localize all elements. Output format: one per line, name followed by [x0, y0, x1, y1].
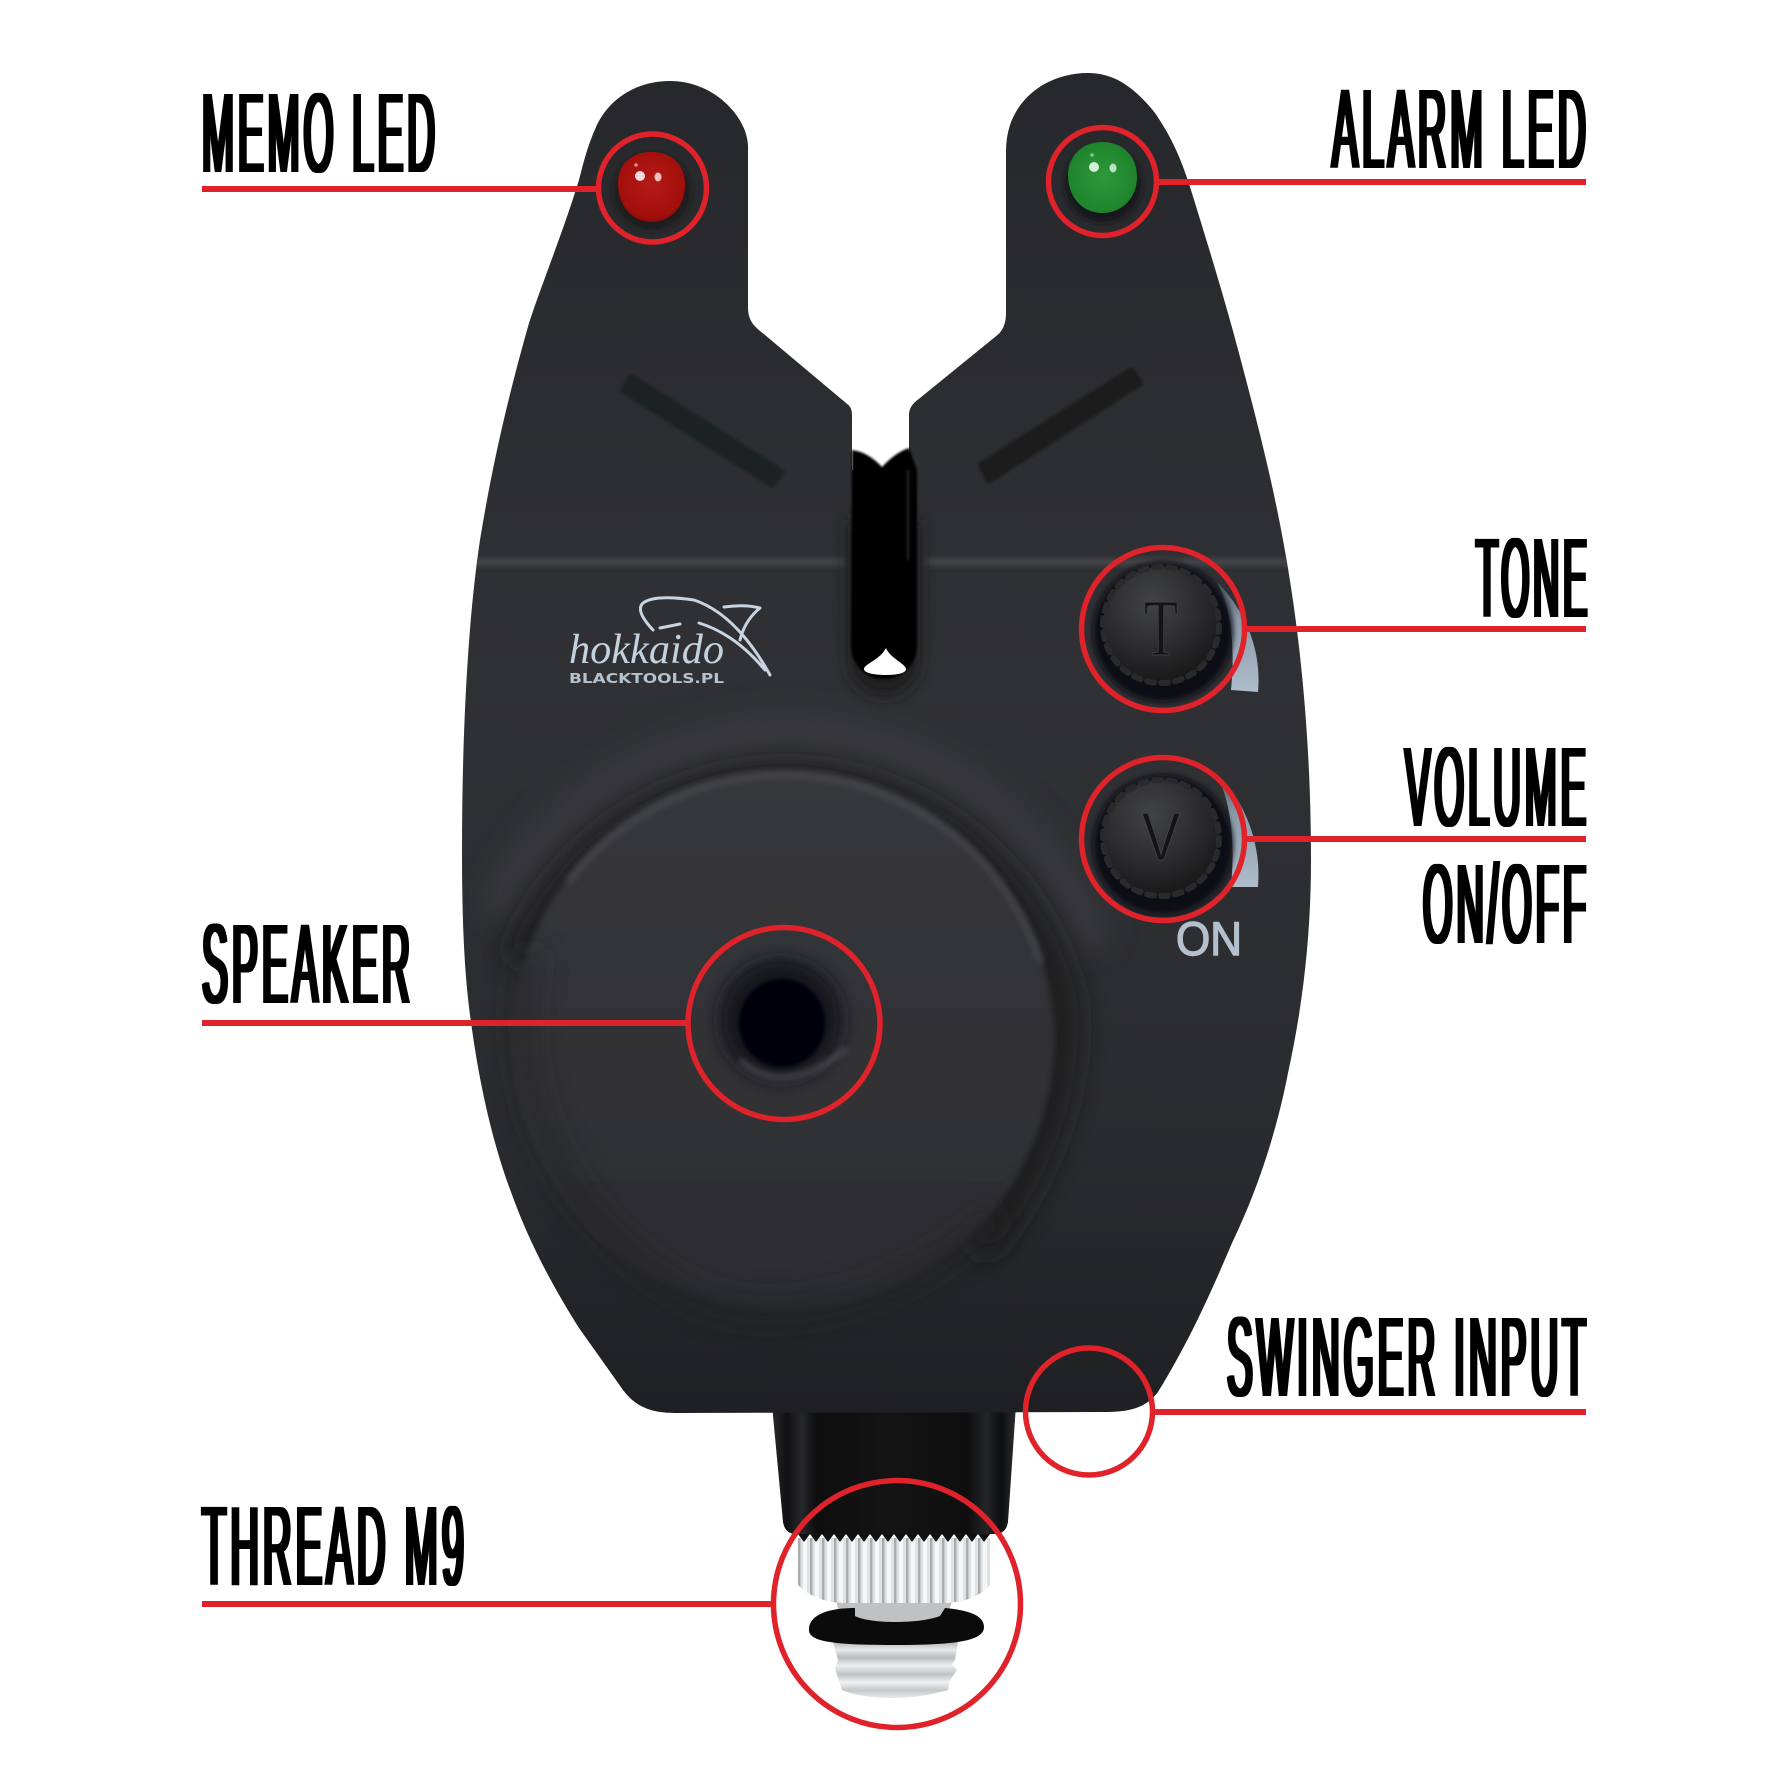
volume knob: V — [1142, 799, 1181, 875]
brand name: hokkaido — [569, 627, 724, 673]
callout: speaker — [202, 901, 880, 1120]
tone knob — [1093, 562, 1233, 702]
screw thread — [833, 1642, 958, 1698]
disc top ridge — [570, 775, 1040, 960]
neck — [835, 1598, 953, 1624]
speaker groove — [525, 782, 1063, 1240]
green led — [1065, 142, 1141, 222]
swinger wheel slot — [851, 448, 917, 679]
marker ring — [1082, 758, 1244, 920]
upper-plate seam — [470, 559, 1310, 565]
knurled collar — [798, 1538, 990, 1603]
marker ring — [1082, 548, 1244, 710]
speaker outer bulge — [501, 759, 1094, 932]
disc left and bottom shadow — [522, 960, 990, 1311]
marker ring — [598, 134, 706, 242]
logo — [569, 598, 770, 687]
leader line — [1247, 626, 1586, 632]
callout: tone — [1082, 515, 1591, 710]
thread connector — [798, 1534, 990, 1698]
volume knob — [1093, 775, 1233, 915]
leader line — [1247, 836, 1586, 842]
left vent slot — [624, 378, 781, 484]
callout: volume on/off — [1082, 724, 1590, 967]
shark mark — [640, 598, 770, 675]
callout: thread m9 — [202, 1480, 1020, 1728]
mount stem — [772, 1405, 1016, 1534]
brand url: BLACKTOOLS.PL — [569, 672, 724, 687]
leader line — [1155, 1409, 1586, 1415]
marker ring — [1048, 128, 1156, 236]
wheel highlight — [906, 470, 910, 560]
leader line — [202, 186, 598, 192]
callout: alarm led — [1048, 66, 1590, 236]
volume scale arc — [1217, 775, 1259, 887]
red led — [614, 152, 690, 230]
marker ring — [1026, 1348, 1152, 1475]
rubber o-ring — [809, 1608, 984, 1645]
on marking: ON — [1176, 912, 1242, 965]
tone knob: T — [1144, 585, 1178, 673]
callout: memo led: MEMO LED — [202, 70, 439, 196]
callout: thread m9: THREAD M9 — [202, 1483, 468, 1609]
callout: speaker: SPEAKER — [202, 901, 414, 1027]
tone scale arc — [1217, 582, 1259, 692]
wheel slot hole — [864, 648, 906, 675]
speaker hole — [719, 958, 845, 1082]
leader line — [202, 1601, 773, 1607]
slot shadow — [848, 520, 920, 696]
right vent slot — [982, 371, 1139, 480]
callout: memo led — [202, 70, 706, 242]
leader line — [202, 1020, 688, 1026]
marker ring — [688, 928, 880, 1120]
leader line — [1157, 179, 1586, 185]
collar teeth — [798, 1534, 990, 1542]
device body — [462, 73, 1311, 1413]
marker ring — [774, 1480, 1020, 1728]
callout: swinger input — [1026, 1294, 1590, 1475]
speaker disc — [513, 770, 1053, 1310]
